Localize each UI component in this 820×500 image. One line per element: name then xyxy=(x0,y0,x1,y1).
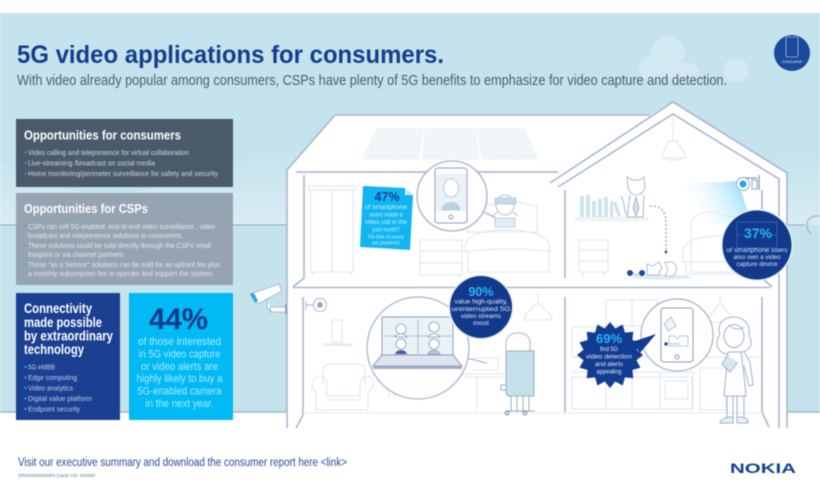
panel: connectivity technology: 5G eMBB xyxy=(28,362,55,372)
sticky note: 47%: users made a xyxy=(370,212,403,218)
logo: NOKIA: NOKIA xyxy=(730,460,796,476)
panel: 44% statistic: 5G-enabled camera xyxy=(138,386,222,398)
bookshelf xyxy=(575,195,648,220)
panel: opportunities for CSPs: a monthly subscription fee to operate and support the system. xyxy=(28,269,214,278)
panel: opportunities for consumers: Live-streaming /broadcast on social media xyxy=(28,158,156,168)
panel: 44% statistic: or video alerts are xyxy=(141,361,218,373)
panel: connectivity technology: Endpoint security xyxy=(28,404,80,414)
panel: opportunities for consumers: Home monitoring/perimeter surveillance for safety and security xyxy=(28,169,218,178)
bedside drawers xyxy=(420,240,462,277)
panel: opportunities for CSPs: footprint or via channel partners. xyxy=(28,250,125,259)
sticky note: 47%: video call in the xyxy=(365,219,407,226)
panel: opportunities for CSPs: CSPs can sell 5G-enabled, end-to-end video surveillance , video xyxy=(28,222,215,231)
panel: 44% statistic xyxy=(129,293,233,420)
star badge: 69%: video detection xyxy=(586,354,632,360)
sticky note: 47%: past month? xyxy=(372,226,400,234)
panel: 44% statistic: in 5G video capture xyxy=(138,348,220,360)
panel: 44% statistic: in the next year. xyxy=(146,398,214,410)
circle stat: 90%: video streams xyxy=(461,313,501,320)
shelf with vase xyxy=(323,320,352,346)
panel: opportunities for consumers xyxy=(16,119,233,187)
solar panels xyxy=(362,128,538,159)
panel: opportunities for consumers: Opportunities for consumers xyxy=(24,128,181,142)
sticky note: 47% xyxy=(360,186,413,250)
bed with person xyxy=(465,195,550,272)
panel: connectivity technology: Connectivity xyxy=(24,301,92,316)
panel: opportunities for CSPs: These solutions could be sold directly through the CSPs' retail xyxy=(28,241,211,250)
sky background xyxy=(0,13,820,412)
circle stat: 90%: value high-quality, xyxy=(454,298,508,306)
title: 5G video applications for consumers. xyxy=(17,41,444,69)
bed: right room xyxy=(683,212,740,274)
woman with phone xyxy=(717,317,753,423)
footer reference code: SR0000000000EN (April) CID: 000000 xyxy=(18,473,95,478)
circle stat: 90%: uninterrupted 5G xyxy=(452,306,511,313)
house shell xyxy=(287,102,787,428)
circle stat: 37%: also own a video xyxy=(734,254,781,261)
icon: indoor wall camera xyxy=(306,298,326,312)
panel: 44% statistic: highly likely to buy a xyxy=(136,373,223,385)
icon: phone badge: CONSUMER xyxy=(782,60,803,64)
pendant lamp: lower middle xyxy=(524,292,552,320)
panel: 44% statistic: 44% xyxy=(149,303,208,336)
panel: connectivity technology: Digital value platform xyxy=(28,394,92,403)
star badge: 69%: find 5G xyxy=(600,346,618,353)
star badge: 69%: 69% xyxy=(596,331,622,346)
callout: laptop video conference xyxy=(367,297,487,399)
desk xyxy=(389,358,505,410)
dashed falling path xyxy=(650,206,666,250)
icon: phone badge xyxy=(774,35,810,71)
panel: opportunities for CSPs xyxy=(16,193,233,285)
star badge: 69%: appealing xyxy=(596,368,622,376)
armchair xyxy=(312,364,373,413)
wardrobe xyxy=(309,186,355,275)
sticky note: 47%: File time of survey xyxy=(368,234,404,240)
panel: connectivity technology xyxy=(16,293,120,420)
panel: 44% statistic: of those interested xyxy=(138,336,221,348)
arrow head: falling vase xyxy=(664,251,668,254)
star badge: 69% xyxy=(577,322,643,388)
star badge: 69%: and alerts xyxy=(595,361,624,368)
security camera light cone xyxy=(678,181,751,225)
circle stat: 37%: capture device xyxy=(736,261,778,268)
circle stat: 90%: 90% xyxy=(468,285,494,299)
panel: connectivity technology: by extraordinary xyxy=(24,328,113,344)
panel: connectivity technology: made possible xyxy=(24,315,102,330)
icon: wall security camera xyxy=(736,175,759,190)
icon: CCTV camera on exterior wall xyxy=(250,284,287,314)
panel: opportunities for consumers: Video calling and telepresence for virtual collaboration xyxy=(28,148,189,157)
pendant lamp: kitchen xyxy=(707,294,733,322)
broken vase and pieces xyxy=(627,262,692,280)
callout: phone video call xyxy=(417,161,496,231)
circle stat: 90% xyxy=(448,274,514,340)
small drawers xyxy=(579,240,608,277)
circle stat: 37%: of smartphone users xyxy=(726,247,788,254)
circle stat: 37% xyxy=(721,209,793,281)
clouds near heading xyxy=(639,36,749,82)
kitchen units xyxy=(572,300,760,410)
panel: opportunities for CSPs: Opportunities for CSPs xyxy=(24,201,148,216)
cat xyxy=(621,177,645,217)
panel: connectivity technology: Video analytics xyxy=(28,384,73,392)
circle stat: 37%: 37% xyxy=(744,225,773,241)
panel: connectivity technology: technology xyxy=(24,342,84,357)
sticky note: 47%: 47% xyxy=(374,190,400,204)
panel: opportunities for CSPs: These "as a Service" solutions can be sold for an upfront fee plus xyxy=(28,260,220,269)
callout: phone alert xyxy=(632,299,713,371)
ceiling lamp: upper room xyxy=(662,116,685,160)
subtitle: With video already popular among consumers, CSPs have plenty of 5G benefits to emphasize for video capture and detection. xyxy=(17,73,727,89)
sticky note: 47%: are pandemic xyxy=(372,240,400,246)
panel: opportunities for CSPs: broadcast and telepresence solutions to consumers. xyxy=(28,231,183,240)
sticky note: 47%: of smartphone xyxy=(365,204,407,211)
exterior light fitting xyxy=(787,216,820,234)
footer link text: Visit our executive summary and download the consumer report here <link> xyxy=(18,457,347,469)
person at desk xyxy=(501,333,535,415)
circle stat: 90%: most xyxy=(473,320,489,327)
panel: connectivity technology: Edge computing xyxy=(28,373,77,382)
